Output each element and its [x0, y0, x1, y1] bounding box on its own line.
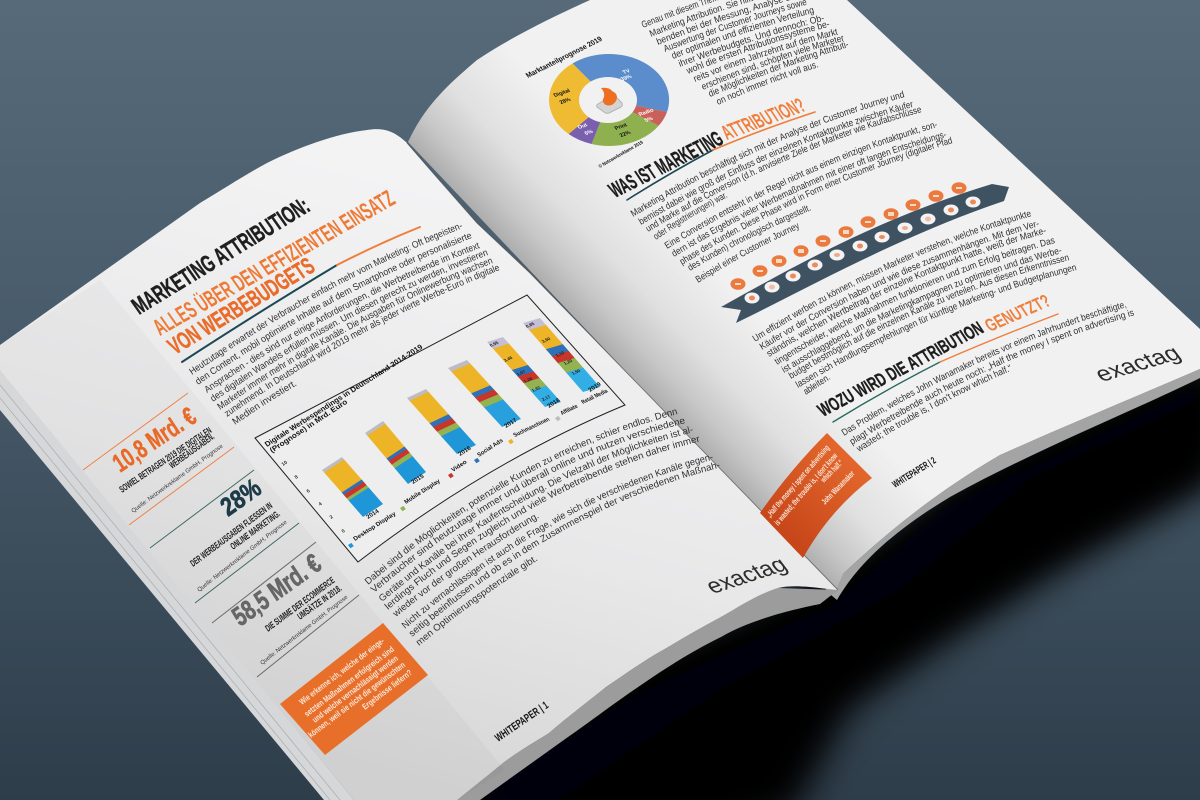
title line 3: VON WERBEBUDGETS — [163, 253, 320, 360]
right page stack — [825, 369, 1200, 600]
donut source: © Netzwerkreklame 2019 — [597, 139, 645, 170]
donut labels: 5% — [644, 116, 655, 124]
donut labels: Digital — [553, 88, 572, 99]
donut chart: market share forecast — [524, 35, 669, 170]
donut title: Marktanteilprognose 2019 — [524, 35, 604, 80]
callout: orange question box: Ergebnisse liefern? — [360, 667, 414, 712]
right page top text block: der optimalen und effizienten Verteilung — [672, 8, 814, 58]
donut labels: Out — [577, 123, 589, 131]
bar values: 1,28 — [523, 376, 534, 384]
bar values: 0,55 — [489, 340, 500, 348]
year labels: 2016 — [458, 446, 473, 458]
chart frame — [255, 295, 625, 562]
chart: digital ad spending — [255, 295, 625, 562]
intro text block: Medien investiert. — [232, 382, 296, 424]
intro text block: Heutzutage erwartet der Verbraucher einfach mehr vom Marketing: Oft begeisten- — [188, 224, 462, 375]
year labels: 2015 — [411, 474, 426, 486]
right page top text block: die Möglichkeiten der Marketing Attributi- — [708, 41, 848, 96]
bar 2018 — [487, 337, 561, 407]
heading: was ist marketing attribution: ATTRIBUTION? — [716, 94, 810, 144]
stat: 58,5 Mrd: 58,5 Mrd. € — [227, 548, 326, 632]
heading: wozu wird die attribution genutzt: WOZU WIRD DIE ATTRIBUTION — [814, 318, 988, 421]
right page body text 3: plagt Werbetreibende auch heute noch: „Half the money I spent on advertising is — [848, 307, 1136, 448]
touchpoints: white circles — [744, 196, 980, 304]
right page top text block — [642, 0, 848, 104]
bar 2017 — [448, 360, 521, 427]
donut labels: 22% — [619, 130, 633, 139]
donut labels: 39% — [620, 74, 634, 83]
right page top text block: wohl die ersten Attributionssysteme be- — [686, 22, 830, 74]
right page body text: bemisst dabei wie groß der Einfluss der einzelnen Kontaktpunkte zwischen Käufer — [638, 102, 912, 225]
left page — [0, 129, 838, 800]
stat: 10,8 Mrd: SOWIEL BETRAGEN 2019 DIE DIGITALEN — [118, 425, 214, 495]
callout: orange question box: und welche vernachlässigt werden — [310, 653, 400, 725]
legend: Social Ads — [477, 438, 505, 459]
footer: whitepaper 1: WHITEPAPER | 1 — [493, 699, 551, 744]
heading underline — [627, 112, 815, 200]
axis ticks: 2 — [329, 514, 335, 521]
bar 2014 — [322, 457, 383, 517]
year labels: 2018 — [547, 398, 562, 410]
right page top text block: erschienen sind, schöpfen viele Marketer — [702, 36, 844, 90]
donut labels: 28% — [559, 97, 573, 106]
bar values — [489, 321, 582, 402]
donut labels: TV — [622, 68, 632, 76]
bar values: 3,46 — [503, 355, 514, 363]
bar values: 3,50 — [541, 336, 552, 344]
legend: Desktop Display — [353, 511, 398, 543]
right page body text 2: Käufer vor der Conversion haben und wie diese zusammenhängen. Mit dem Ver- — [759, 222, 1039, 350]
spine line — [407, 143, 838, 590]
right page body text: phase des Kunden. Diese Phase wird in Form einer Customer Journey (digitaler Pfad — [680, 136, 952, 266]
axis ticks: 8 — [294, 474, 300, 481]
right page body text: Eine Conversion entsteht in der Regel nicht aus einem einzigen Kontaktpunkt, son- — [664, 123, 937, 249]
segment: print — [592, 100, 659, 146]
left page stack edge lines — [0, 385, 340, 800]
right page — [408, 0, 1200, 592]
bar values: 1,10 — [555, 350, 566, 358]
bar values: 1,50 — [571, 368, 582, 376]
year labels: 2019 — [588, 382, 603, 394]
legend: Suchmaschinen — [513, 417, 552, 439]
touchpoints: glyphs in orange circles — [735, 187, 962, 285]
intro text block: Marketer immer mehr in digitale Kanäle. Die Ausgaben für Onlinewerbung wachsen — [216, 258, 493, 410]
legend: Mobile Display — [404, 478, 442, 506]
customer journey ribbon — [721, 182, 1009, 323]
footer: whitepaper 2: WHITEPAPER | 2 — [891, 455, 939, 490]
left page lower text block: seitig beeinflussen und ob es in dem Zusammenspiel der verschiedenen Maßnah- — [410, 462, 720, 636]
right page body text 3: Das Problem, welches John Wanamaker bereits vor einem Jahrhundert beschäftigte, — [840, 299, 1128, 439]
right page body text 3: wasted; the trouble is, I don't know which half.“ — [854, 363, 1014, 455]
right page body text: des Kunden) chronologisch dargestellt. — [688, 206, 811, 270]
year labels: 2014 — [366, 509, 381, 521]
stat: 28% — [150, 470, 299, 603]
heading: marketing attribution — [127, 186, 400, 360]
axis ticks: 6 — [306, 488, 312, 495]
legend: Retail Media — [581, 389, 610, 406]
logo: exactag left: exactag — [700, 552, 793, 599]
stat: 10,8 Mrd: Quelle: Netzwerkreklame GmbH, Prognose — [131, 443, 225, 515]
bar values: 0,85 — [525, 321, 536, 329]
segment: digital — [549, 64, 609, 134]
right page body text 2: ableiten. — [801, 372, 833, 398]
axis ticks — [281, 460, 347, 535]
stat: 28%: 28% — [216, 474, 266, 522]
right page body text 2: budget bestmöglich auf die einzelnen Kanäle zu verteilen. Aus diesen Erkenntnissen — [787, 252, 1070, 382]
bar 2015 — [365, 421, 426, 484]
left page lower text block: Geräte und Kanäle bei ihrer Kaufentscheidung. Die Vielzahl der Möglichkeiten ist al- — [379, 426, 693, 600]
segment: TV — [572, 54, 669, 112]
bar 2019 — [523, 318, 600, 392]
chart title: Digitale Werbespendings in Deutschland 2014-2019 — [263, 342, 424, 449]
right page body text 2: ständnis, welchen Wertbeitrag der einzelne Kontaktpunkt hatte, weiß der Marke- — [767, 229, 1046, 356]
legend: Video — [451, 459, 469, 474]
legend — [348, 389, 610, 548]
right page body text: oder Registrierungen) war. — [654, 193, 728, 240]
touchpoints: glyphs in white circles — [749, 200, 976, 300]
callout: orange quote box: is wasted; the trouble is, I don't know — [772, 450, 839, 527]
book shadow — [430, 360, 1200, 800]
left page lower text block: men Optimierungspotenziale gibt. — [416, 557, 538, 646]
stat: 28%: ONLINE MARKETING. — [229, 509, 282, 552]
left page lower text block: Nicht zu vernachlässigen ist auch die Frage, wie sich die verschiedenen Kanäle gegen- — [402, 456, 712, 628]
right page body text 2: Um effizient werben zu können, müssen Marketer verstehen, welche Kontaktpunkte — [752, 212, 1031, 341]
right page body text 2: tingentscheider, welche Maßnahmen funktionieren und zum Erfolg beitragen. Das — [774, 238, 1055, 364]
axis ticks: 0 — [341, 528, 347, 535]
stat: 58,5 Mrd: UMSÄTZE IN 2018. — [296, 583, 344, 622]
donut labels — [553, 68, 656, 139]
segment: radio — [609, 100, 667, 126]
donut labels: Print — [614, 123, 629, 132]
right page body text: dern ist das Ergebnis vieler Werbemaßnahmen mit einer oft langen Entscheidungs- — [672, 133, 946, 256]
touchpoints: orange circles — [730, 182, 966, 290]
donut labels: Radio — [638, 108, 656, 118]
callout: orange quote box: „Half the money I spent on advertising — [764, 443, 831, 519]
ribbon band — [721, 184, 1009, 323]
heading underline — [182, 227, 420, 362]
year labels — [366, 382, 603, 521]
stat: 58,5 Mrd — [212, 542, 359, 677]
icon: flame — [597, 88, 622, 113]
legend: Affiliate — [560, 404, 580, 417]
left page lower text block — [364, 410, 720, 646]
stat: 10,8 Mrd: 10,8 Mrd. € — [108, 403, 202, 478]
callout: orange quote box: John Wanamaker — [819, 468, 857, 506]
heading underline — [833, 314, 1058, 422]
left page lower text block: Verbraucher sind heutzutage immer und überall online und nutzen verschiedene — [370, 418, 685, 592]
intro text block: den Content, mobil optimierte Inhalte auf dem Smartphone oder personalisierte — [196, 234, 472, 384]
contact shadow — [470, 385, 1200, 800]
bar values: 1,20 — [563, 358, 574, 366]
bar 2016 — [407, 389, 476, 454]
book shadow, deep layer — [430, 360, 1200, 800]
bar values: 1,32 — [531, 385, 542, 393]
bar values: 2,17 — [541, 394, 552, 402]
heading: wozu wird die attribution genutzt: GENUTZT? — [981, 291, 1055, 336]
left page lower text block: Dabei sind die Möglichkeiten, potenzielle Kunden zu erreichen, schier endlos. Denn — [364, 410, 678, 584]
right page body text 2: lassen sich Handlungsempfehlungen für künftige Marketing- und Budgetplanungen — [794, 262, 1078, 391]
right page body text: und Marke auf die Conversion (d.h. anvisierte Ziele der Marketer wie Kaufabschlüsse — [646, 108, 922, 232]
intro text block: des digitalen Wandels erfüllen müssen. Um diesen gerecht zu werden, investieren — [211, 250, 488, 402]
heading: was ist marketing attribution: WAS IST MARKETING — [604, 126, 728, 202]
right page body text 2 — [752, 212, 1076, 394]
right page body text — [630, 90, 952, 283]
title line 2: ALLES ÜBER DEN EFFIZIENTEN EINSATZ — [148, 186, 400, 341]
right page top text block: ihrer Werbebudgets. Und dennoch: Ob- — [678, 16, 824, 67]
left page stack, lower side — [455, 588, 838, 800]
left page lower text block: wieder vor der großen Herausforderung. — [392, 514, 539, 616]
right page top text block: on noch immer nicht voll aus. — [716, 63, 818, 104]
stat: 58,5 Mrd: Quelle: Netzwerkreklame GmbH, Prognose — [260, 594, 349, 667]
axis ticks: 10 — [281, 460, 289, 468]
intro text block: zunehmend. In Deutschland wird 2019 mehr als jeder vierte Werbe-Euro in digitale — [224, 266, 500, 417]
intro text block: Ansprachen - dies sind nur einige Anforderungen, die Werbetreibende im Kontext — [205, 242, 480, 393]
right page body text: Beispiel einer Customer Journey — [695, 223, 799, 283]
right page body text 2: ist ausschlaggebend, um die Marketingkampagnen zu optimieren und das Werbe- — [781, 249, 1062, 373]
year labels: 2017 — [504, 418, 519, 430]
left page sidebar shading — [0, 280, 505, 800]
callout: orange quote box — [760, 433, 872, 558]
left page lower text block: lerdings Fluch und Segen zugleich und viele Werbetreibende stehen daher immer — [384, 436, 699, 610]
stat: 10,8 Mrd — [83, 393, 234, 525]
chart title: (Prognose) in Mrd. Euro — [268, 397, 350, 455]
stat: 58,5 Mrd: DIE SUMME DER ECOMMERCE — [264, 575, 337, 634]
callout: orange question box: setzten Maßnahmen erfolgreich sind — [302, 644, 396, 719]
logo: exactag right: exactag — [1089, 341, 1186, 387]
callout: orange question box — [280, 623, 428, 755]
donut labels: 6% — [584, 129, 595, 137]
left page stack, outer side — [0, 368, 354, 800]
right page body text: Marketing Attribution beschäftigt sich mit der Analyse der Customer Journey und — [630, 90, 904, 217]
axis ticks: 4 — [318, 501, 324, 508]
stat: 10,8 Mrd: WERBEAUSGABEN. — [168, 431, 217, 471]
callout: orange quote box: which half.“ — [818, 458, 845, 485]
stat: 28%: Quelle: Netzwerkreklame GmbH, Prognose — [197, 519, 289, 594]
segment: out of home — [569, 100, 609, 144]
bar values: 1,07 — [516, 369, 527, 377]
donut centre — [579, 77, 637, 123]
callout: orange question box: Wie erkenne ich, welche der einge- — [297, 636, 386, 707]
title line 1: MARKETING ATTRIBUTION: — [127, 193, 315, 320]
right page top text block: reits vor einem Jahrzehnt auf dem Markt — [694, 28, 838, 82]
callout: orange question box: können, weil sie nicht die gewünschten — [306, 660, 407, 740]
stat: 28%: DER WERBEAUSGABEN FLIESSEN IN — [189, 500, 275, 569]
